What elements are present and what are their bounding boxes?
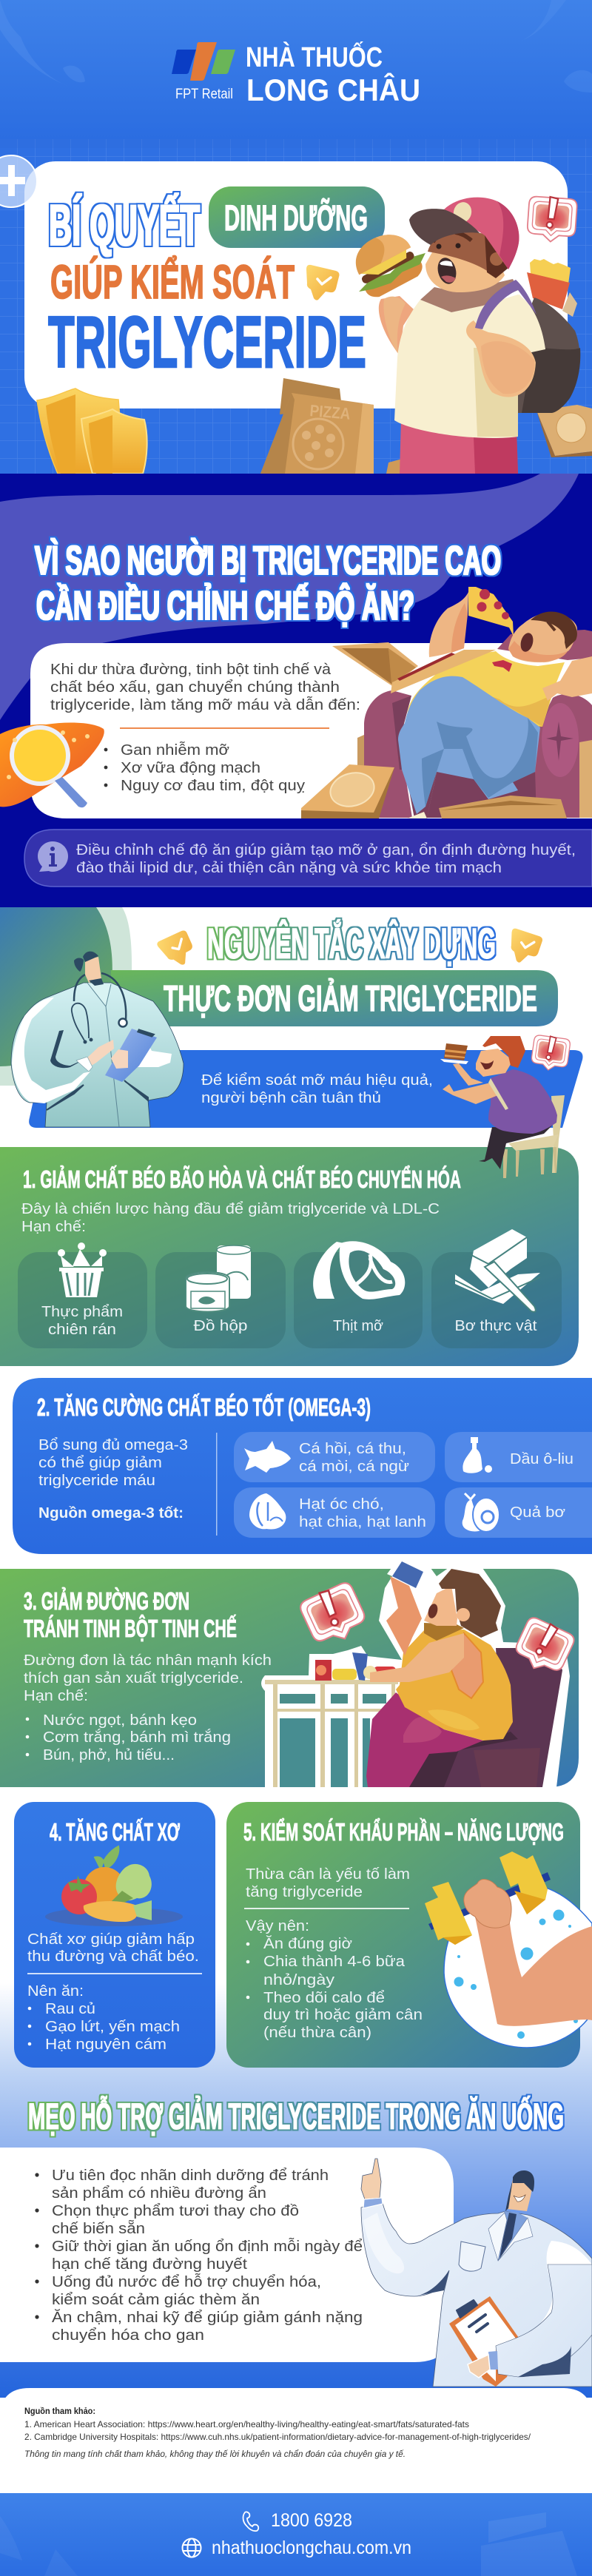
forearm — [370, 1633, 464, 1682]
illustration: male doctor — [361, 2159, 592, 2387]
pants — [398, 676, 540, 814]
hand and cuff — [361, 2159, 383, 2208]
mouth — [435, 256, 459, 286]
icon: cans — [186, 1245, 251, 1311]
torso — [488, 1069, 557, 1134]
torso — [396, 1630, 513, 1741]
card: olive oil — [445, 1432, 592, 1482]
arm with pizza — [429, 592, 468, 657]
icon: fried chicken bucket — [58, 1242, 107, 1297]
stethoscope — [72, 973, 126, 1040]
dumbbell left — [425, 1882, 472, 1945]
panel: references: 1. American Heart Association: https://www.heart.org/en/healthy-living/healthy-eating/eat-smart/fats/saturated-fats — [24, 2419, 469, 2429]
intro text — [50, 662, 360, 713]
text: thu đường và chất béo. — [27, 1948, 199, 1965]
text: Vậy nên: — [246, 1918, 309, 1934]
cans on table — [315, 1652, 396, 1681]
arms — [453, 1063, 483, 1086]
text: Theo dõi calo để — [263, 1990, 385, 2006]
intro text: Khi dư thừa đường, tinh bột tinh chế và — [50, 662, 332, 678]
brand name — [246, 40, 420, 107]
hands — [87, 1040, 114, 1067]
legs — [417, 474, 502, 514]
heading: why adjust diet — [35, 537, 501, 628]
card: fried food: chiên rán — [48, 1322, 116, 1338]
head — [505, 2170, 534, 2211]
head — [85, 957, 101, 983]
info text — [76, 842, 576, 876]
tips list: Uống đủ nước để hỗ trợ chuyển hóa, — [52, 2273, 321, 2290]
icon: alert large — [297, 1580, 370, 1650]
white title panel — [24, 161, 568, 408]
icon: fish — [244, 1441, 291, 1473]
card: margarine — [431, 1229, 562, 1348]
right arm — [542, 656, 592, 701]
icon: vegetables — [45, 1846, 183, 1926]
icon: fatty liver with magnifier — [0, 723, 104, 807]
head — [476, 1049, 513, 1077]
description: Hạn chế: — [21, 1219, 86, 1235]
fist — [464, 1880, 511, 1928]
brand name: LONG CHÂU — [246, 72, 420, 107]
icon: meat — [313, 1241, 405, 1299]
text: (nếu thừa cân) — [263, 2025, 371, 2041]
info text: Điều chỉnh chế độ ăn giúp giảm tạo mỡ ở gan, ổn định đường huyết, — [76, 842, 576, 858]
icon: burger man — [340, 198, 580, 514]
hero band — [0, 139, 592, 514]
icon: alert small — [511, 1615, 576, 1679]
illustration: arm with dumbbell — [425, 1852, 592, 2048]
illustration: woman doctor — [11, 952, 184, 1127]
text: nhỏ/ngày — [263, 1972, 334, 1988]
watermark storefront — [481, 2512, 577, 2576]
sleeve — [485, 295, 545, 349]
head — [508, 612, 577, 662]
text: Chất xơ giúp giảm hấp — [27, 1931, 195, 1948]
card: nuts: Hạt óc chó, — [299, 1496, 384, 1513]
scarf — [420, 279, 518, 312]
panel: references: Nguồn tham khảo: — [24, 2406, 95, 2416]
panel: references — [0, 2388, 592, 2493]
head — [426, 229, 508, 292]
highlight — [12, 998, 90, 1103]
panel: references: 2. Cambridge University Hospitals: https://www.cuh.nhs.uk/patient-information/dietary-advice-for-management-of-high-triglycerides/ — [24, 2432, 531, 2442]
description — [21, 1201, 440, 1235]
shadows — [50, 1030, 87, 1068]
banner: menu heading — [111, 970, 558, 1026]
card: fish: cá mòi, cá ngừ — [299, 1459, 409, 1475]
brand name: NHÀ THUỐC — [246, 40, 383, 73]
raised arm — [386, 1576, 422, 1655]
card: canned food — [155, 1245, 286, 1348]
head — [424, 1586, 457, 1626]
decorative corner behind doctor — [0, 907, 132, 1086]
description: Hạn chế: — [24, 1688, 88, 1704]
icon: bottle — [462, 1437, 482, 1473]
cap — [409, 198, 519, 269]
text — [27, 1931, 202, 2053]
card: nuts: hạt chia, hạt lanh — [299, 1514, 426, 1530]
description — [24, 1652, 272, 1704]
icon: pizza boxes: PIZZA — [309, 401, 352, 423]
card: nuts — [234, 1487, 435, 1538]
text: Gạo lứt, yến mạch — [45, 2019, 180, 2035]
consequences list: Nguy cơ đau tim, đột quỵ — [121, 778, 305, 794]
icon: info — [38, 841, 68, 872]
collar — [92, 988, 106, 1006]
icon: avocado — [462, 1493, 500, 1532]
description — [38, 1437, 188, 1521]
description: Đường đơn là tác nhân mạnh kích — [24, 1652, 272, 1669]
burger — [340, 220, 434, 304]
description: thích gan sản xuất triglyceride. — [24, 1670, 243, 1686]
consequences list: Gan nhiễm mỡ — [121, 741, 229, 759]
legs — [479, 1121, 556, 1169]
tips list: sản phẩm có nhiều đường ẩn — [52, 2185, 266, 2202]
phone: 1800 6928 — [271, 2510, 352, 2531]
panel 3: reduce sugar — [0, 1569, 579, 1787]
description: có thể giúp giảm — [38, 1455, 162, 1471]
panel 1: reduce fats — [0, 1147, 579, 1366]
card: margarine: Bơ thực vật — [454, 1318, 537, 1334]
card: canned food: Đồ hộp — [194, 1318, 247, 1334]
panel: references: Thông tin mang tính chất tham khảo, không thay thế lời khuyên và chẩn đoán của chuyên gia y tế. — [24, 2449, 406, 2459]
panel 2: omega-3 — [13, 1378, 592, 1554]
arm — [475, 1917, 592, 2026]
title: TRIGLYCERIDE: TRIGLYCERIDE — [48, 301, 366, 383]
text: Nên ăn: — [27, 1983, 84, 2000]
shirt — [407, 651, 565, 727]
panel: blue intro — [29, 1050, 583, 1128]
tips list: chế biến sẵn — [52, 2220, 145, 2237]
clipboard — [105, 1029, 157, 1082]
pill: DINH DƯỠNG — [209, 186, 385, 248]
sofa — [357, 630, 592, 818]
text: tăng triglyceride — [246, 1884, 363, 1900]
text: Chia thành 4-6 bữa — [263, 1954, 406, 1970]
raised can — [392, 1561, 423, 1588]
title: BÍ QUYẾT: BÍ QUYẾT — [49, 192, 200, 258]
icon: butter and knife — [455, 1229, 540, 1312]
description: Nguồn omega-3 tốt: — [38, 1505, 184, 1521]
heading: 2. TĂNG CƯỜNG CHẤT BÉO TỐT (OMEGA-3) — [37, 1393, 371, 1421]
illustration: woman with soda — [261, 1560, 576, 1787]
panel 5: portion control — [226, 1802, 580, 2068]
info text: đào thải lipid dư, cải thiện cân nặng và sức khỏe tim mạch — [76, 860, 502, 876]
card: avocado: Quả bơ — [510, 1504, 565, 1521]
folded arm — [496, 2264, 592, 2377]
shirt and tie — [498, 2211, 528, 2261]
description: Bổ sung đủ omega-3 — [38, 1437, 188, 1453]
description: triglyceride máu — [38, 1473, 155, 1489]
white sticker outline — [261, 1560, 570, 1787]
chair — [503, 1095, 565, 1178]
tips list: kiểm soát cảm giác thèm ăn — [52, 2292, 260, 2308]
text: Ăn đúng giờ — [263, 1935, 352, 1952]
tips list: Ưu tiên đọc nhãn dinh dưỡng để tránh — [52, 2168, 329, 2184]
card: fried food — [18, 1242, 147, 1348]
coat with raised arm — [361, 2203, 592, 2387]
pocket — [459, 2242, 485, 2271]
consequences list: Xơ vữa động mạch — [121, 760, 260, 776]
shorts — [400, 418, 518, 478]
feet — [407, 812, 427, 818]
legs — [366, 1692, 483, 1787]
heading: 3. GIẢM ĐƯỜNG ĐƠN — [24, 1587, 189, 1615]
boxes — [301, 764, 394, 816]
callout: info bar — [24, 830, 592, 887]
panel: white explanation — [30, 643, 592, 818]
card: fish — [234, 1432, 435, 1482]
title: GIÚP KIỂM SOÁT: GIÚP KIỂM SOÁT — [50, 255, 295, 309]
card: fatty meat: Thịt mỡ — [333, 1318, 383, 1334]
icon: globe — [182, 2538, 201, 2557]
armchair — [381, 1648, 562, 1787]
heading — [24, 1587, 237, 1642]
panel 4: fibre — [14, 1802, 215, 2068]
website: nhathuoclongchau.com.vn — [212, 2538, 411, 2558]
fries — [527, 259, 577, 317]
icon: pizza boxes — [260, 378, 592, 474]
open pizza box — [332, 642, 418, 686]
description: Đây là chiến lược hàng đầu để giảm triglyceride và LDL-C — [21, 1201, 440, 1217]
icon: walnut — [249, 1493, 286, 1530]
lid — [391, 650, 496, 693]
text — [244, 1866, 423, 2041]
plus badge — [0, 155, 37, 207]
icon: alert — [531, 1034, 571, 1072]
strap — [475, 280, 536, 329]
tips list: chuyển hóa cho gan — [52, 2327, 204, 2344]
tips list: Chọn thực phẩm tươi thay cho đồ — [52, 2203, 299, 2219]
list: Cơm trắng, bánh mì trắng — [43, 1729, 231, 1746]
text: Thừa cân là yếu tố làm — [246, 1866, 410, 1883]
list — [26, 1712, 231, 1763]
card: olive oil: Dầu ô-liu — [510, 1451, 574, 1467]
pill: DINH DƯỠNG: DINH DƯỠNG — [224, 198, 368, 238]
heading: TRÁNH TINH BỘT TINH CHẾ — [24, 1614, 237, 1642]
panel: blue intro: người bệnh cần tuân thủ — [201, 1090, 381, 1106]
heading: 4. TĂNG CHẤT XƠ — [50, 1818, 181, 1846]
list: Bún, phở, hủ tiếu... — [43, 1747, 175, 1763]
card: fried food: Thực phẩm — [41, 1304, 123, 1320]
section: dark navy background — [0, 474, 592, 907]
table — [265, 1680, 398, 1787]
text: duy trì hoặc giảm cân — [263, 2007, 423, 2023]
text: Rau củ — [45, 2001, 95, 2017]
illustration: overweight man on sofa — [301, 587, 592, 818]
backpack — [511, 297, 580, 413]
hand — [488, 2351, 498, 2370]
icon: check left — [156, 924, 201, 970]
intro text: triglyceride, làm tăng mỡ máu và dẫn đến: — [50, 696, 360, 713]
tips list: Giữ thời gian ăn uống ổn định mỗi ngày để — [52, 2238, 363, 2255]
footer band — [0, 2493, 592, 2576]
pizza slice — [468, 587, 514, 636]
card: fatty meat — [294, 1241, 423, 1348]
dumbbell right — [500, 1852, 548, 1914]
tips list: Ăn chậm, nhai kỹ để giúp giảm gánh nặng — [52, 2309, 363, 2326]
arm left — [379, 296, 414, 355]
tips list — [35, 2168, 363, 2344]
bar — [428, 1872, 551, 1930]
clipboard — [449, 2296, 520, 2387]
coat — [11, 983, 184, 1127]
list: Nước ngọt, bánh kẹo — [43, 1712, 197, 1729]
arm right — [466, 320, 536, 397]
shirt — [394, 295, 545, 438]
tips list: hạn chế tăng đường huyết — [52, 2256, 247, 2273]
header band — [0, 0, 592, 139]
consequences list — [104, 741, 305, 794]
cake — [440, 1043, 468, 1064]
icon: phone — [243, 2512, 258, 2531]
icon: shields — [37, 389, 147, 474]
logo FPT Retail — [172, 42, 235, 102]
bottom gradient background — [0, 1983, 592, 2398]
intro text: chất béo xấu, gan chuyển chúng thành — [50, 679, 340, 696]
icon: check right — [509, 928, 543, 964]
card: fish: Cá hồi, cá thu, — [299, 1441, 406, 1457]
card: avocado — [445, 1487, 592, 1538]
icon: alert — [527, 195, 577, 243]
panel: tips — [0, 2148, 454, 2362]
panel: blue intro: Để kiểm soát mỡ máu hiệu quả, — [201, 1072, 433, 1089]
armhole — [451, 1633, 483, 1698]
logo FPT Retail: FPT Retail — [175, 87, 233, 102]
illustration: man with cake — [440, 1036, 565, 1178]
icon: check badge — [306, 265, 339, 300]
neck — [424, 1623, 464, 1641]
shadow — [414, 2270, 449, 2296]
text: Hạt nguyên cám — [45, 2037, 166, 2053]
